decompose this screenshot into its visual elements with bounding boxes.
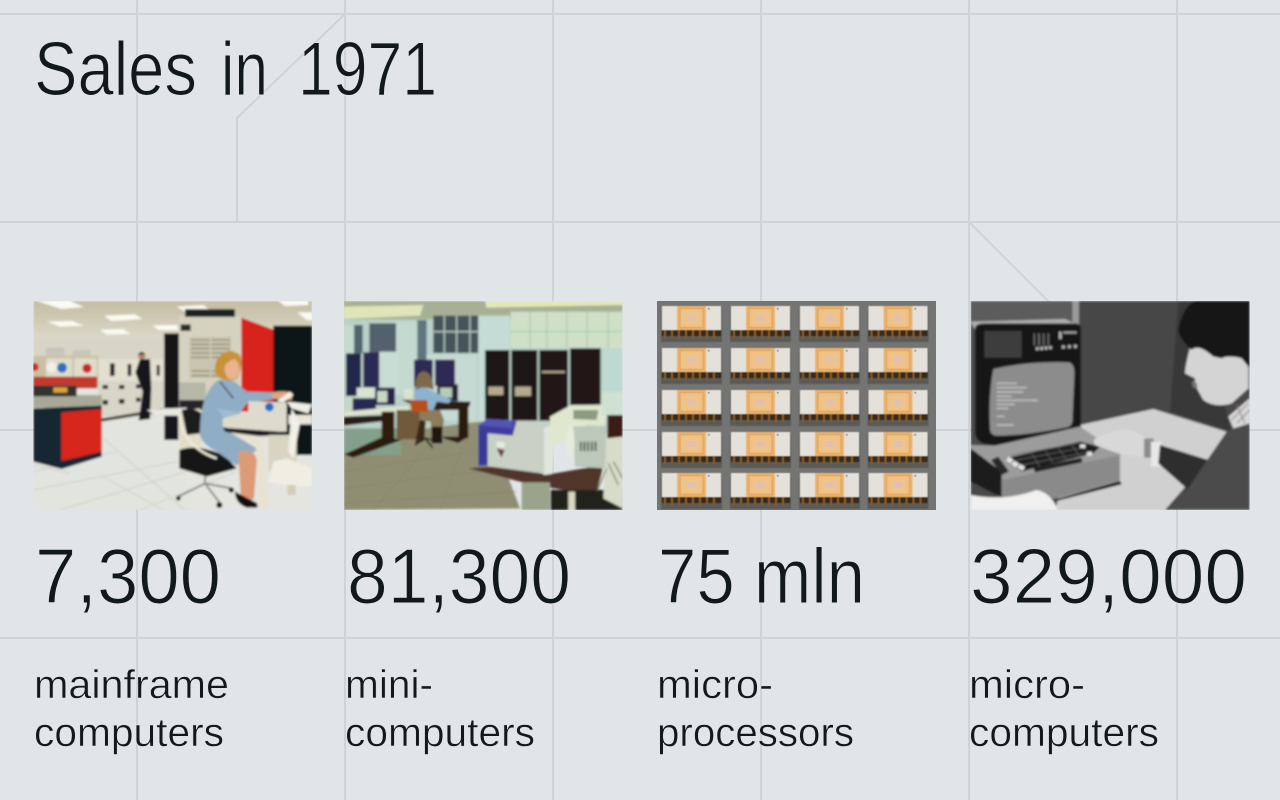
photo: minicomputer lab — [344, 301, 623, 510]
number: 329,000: 329,000 — [970, 532, 1247, 620]
number: 81,300: 81,300 — [347, 532, 571, 620]
label: micro-processors: processors — [657, 711, 854, 755]
number: 7,300: 7,300 — [35, 532, 221, 620]
title: 1971 — [298, 27, 437, 112]
photo: man at microcomputer terminal — [970, 301, 1250, 510]
number: 75 mln: 75 mln — [658, 532, 865, 620]
photo: grid of microprocessor chips — [657, 301, 936, 510]
label: mainframe computers: mainframe — [34, 663, 229, 707]
label: micro-computers: computers — [969, 711, 1159, 755]
title: in — [221, 27, 268, 112]
panel: mainframe computers — [31, 301, 312, 755]
label: mini-computers: computers — [345, 711, 535, 755]
panel: micro-processors — [657, 301, 936, 755]
label: mainframe computers: computers — [34, 711, 224, 755]
label: micro-processors: micro- — [657, 663, 773, 707]
label: mini-computers: mini- — [345, 663, 433, 707]
photo: mainframe computer room — [33, 301, 312, 510]
panel: micro-computers — [969, 301, 1250, 755]
label: micro-computers: micro- — [969, 663, 1085, 707]
title: Sales — [34, 27, 197, 112]
panel: mini-computers — [344, 301, 623, 755]
